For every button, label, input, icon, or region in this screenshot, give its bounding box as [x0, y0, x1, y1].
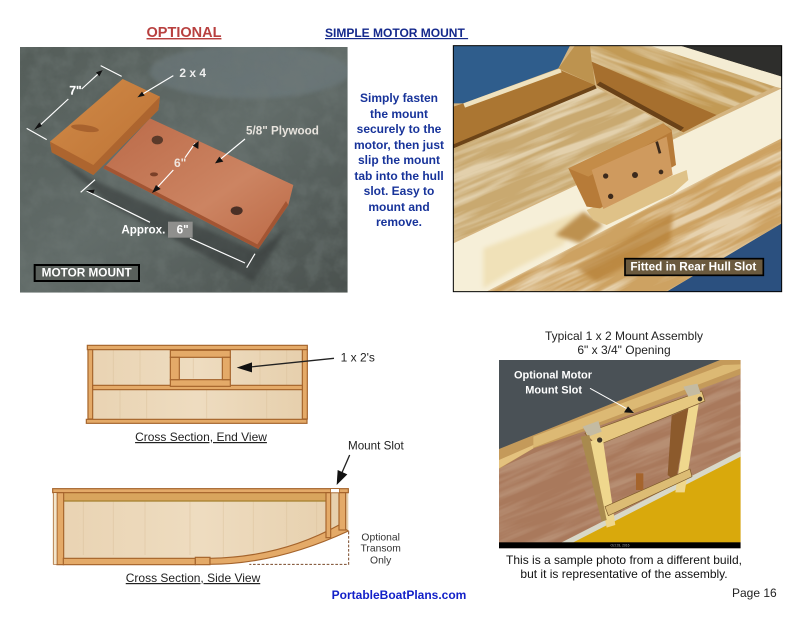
photo: mount assembly [499, 360, 741, 548]
top right rim [650, 46, 782, 88]
caption: typical mount assembly: Typical 1 x 2 Mount Assembly [545, 329, 703, 343]
caption: typical mount assembly: 6" x 3/4" Opening [577, 343, 671, 357]
blue background [453, 46, 570, 103]
plywood [103, 118, 293, 249]
arrow: mount slot [337, 455, 350, 485]
arrow: 1 x 2's [237, 358, 334, 372]
photo: motor mount [20, 45, 350, 293]
caption: sample photo note: This is a sample photo from a different build, [506, 553, 742, 567]
dashed optional transom outline [249, 532, 349, 564]
front rim [453, 88, 782, 292]
label: optional transom only: Transom [360, 544, 401, 555]
caption: side view: Cross Section, Side View [126, 571, 261, 585]
instructions text: the mount [370, 107, 428, 121]
instructions text: tab into the hull [354, 169, 444, 183]
instructions text [354, 91, 444, 229]
2x4 block [50, 79, 160, 175]
caption: end view: Cross Section, End View [135, 430, 267, 444]
tab [587, 170, 688, 225]
dimension lines [27, 66, 255, 268]
plywood grain [499, 374, 740, 542]
label: motor mount: MOTOR MOUNT [42, 267, 132, 280]
labels: 2 x 4 [179, 66, 206, 80]
label: 1 x 2's: 1 x 2's [341, 351, 375, 365]
photo: fitted in rear hull slot [452, 45, 782, 292]
arrow: mount slot pointer [590, 388, 634, 413]
mount block [568, 123, 676, 208]
far corner [558, 46, 595, 85]
caption: sample photo note: but it is representative of the assembly. [520, 567, 728, 581]
footer: website: PortableBoatPlans.com [332, 588, 466, 602]
caption: typical mount assembly [545, 329, 703, 357]
instructions text: mount and [368, 200, 430, 214]
photo date stamp: Oct 28, 2016 [610, 544, 630, 548]
label: optional motor mount slot: Optional Motor [514, 370, 593, 382]
labels [69, 66, 319, 238]
label: motor mount [35, 265, 139, 281]
rim [499, 360, 741, 469]
floor [453, 87, 683, 242]
instructions text: slip the mount [358, 153, 440, 167]
label: optional transom only [360, 533, 401, 567]
label: optional transom only: Optional [361, 533, 400, 544]
labels: 6" [174, 156, 186, 170]
yellow hull [568, 453, 741, 542]
label: optional transom only: Only [370, 556, 392, 567]
label: mount slot: Mount Slot [348, 440, 404, 453]
heading: optional: OPTIONAL [147, 25, 222, 41]
labels: Approx. [121, 224, 165, 237]
label: optional motor mount slot: Mount Slot [525, 384, 582, 396]
instructions text: motor, then just [354, 138, 444, 152]
labels: 5/8" Plywood [246, 125, 319, 138]
left wall [453, 70, 595, 145]
front side [487, 138, 782, 292]
labels: 6" [177, 224, 189, 237]
instructions text: securely to the [357, 122, 442, 136]
footer: page number: Page 16 [732, 586, 777, 600]
label: optional motor mount slot [514, 370, 593, 396]
diagram: cross section end view [86, 345, 375, 423]
instructions text: remove. [376, 215, 422, 229]
labels: 7" [69, 83, 82, 97]
caption: sample photo note [506, 553, 742, 581]
shadow [58, 158, 284, 281]
instructions text: Simply fasten [360, 91, 438, 105]
diagram: cross section side view [53, 440, 404, 567]
label: fitted in rear hull slot: Fitted in Rear Hull Slot [630, 260, 756, 273]
heading: simple motor mount: SIMPLE MOTOR MOUNT [325, 26, 468, 40]
concrete [499, 360, 723, 450]
instructions text: slot. Easy to [364, 184, 434, 198]
frame [585, 391, 705, 446]
far wall [590, 46, 775, 115]
